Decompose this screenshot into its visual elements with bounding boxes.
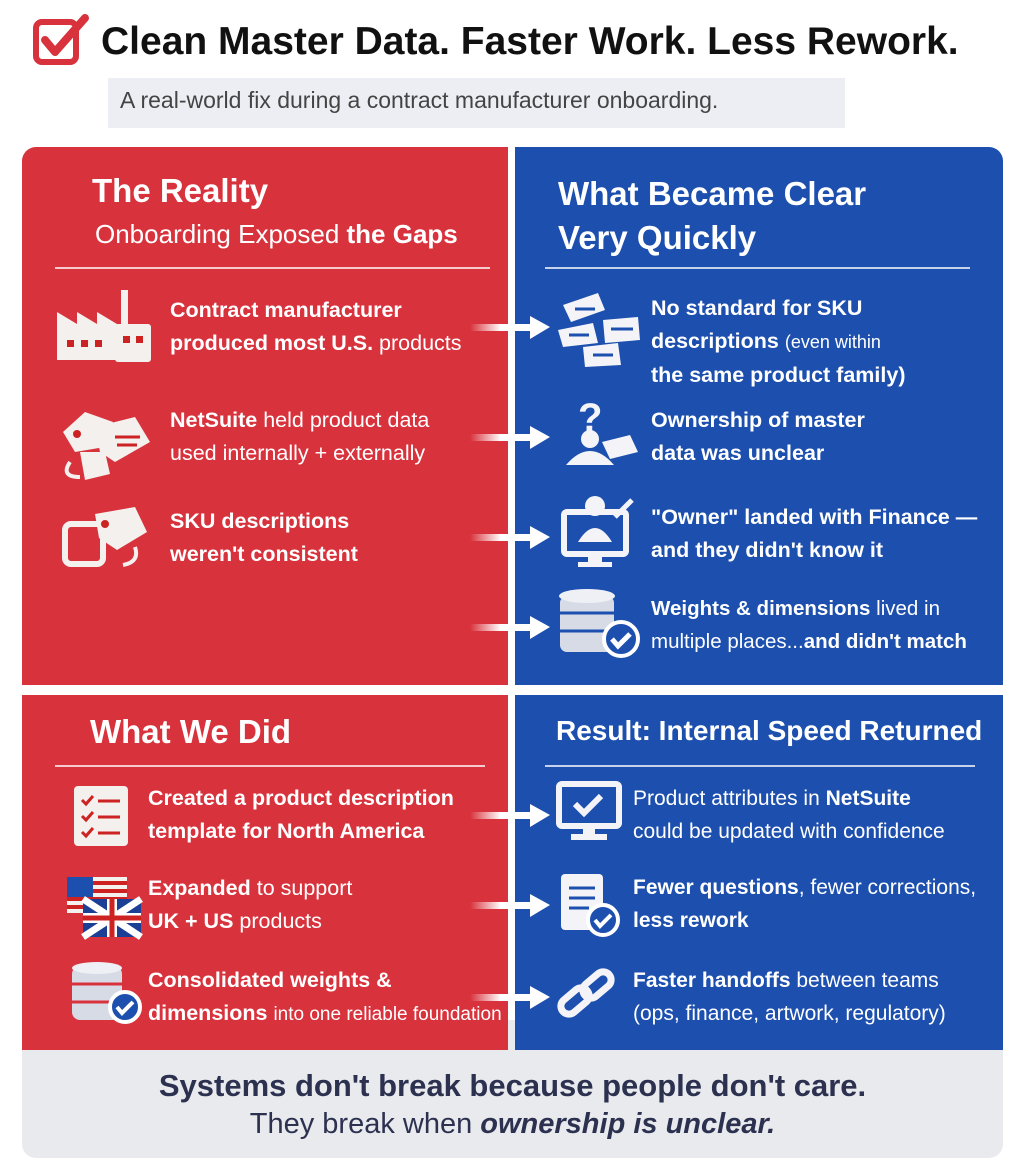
text: no standard: descriptions (even within [651,329,881,353]
icon: flags [67,877,143,940]
heading: what we did: What We Did [90,713,291,750]
text: sku descriptions: weren't consistent [170,542,358,566]
text: product attributes [633,787,945,843]
icon: person question: ? [578,397,602,440]
text: netsuite [170,408,430,465]
icon: person question [566,397,638,465]
text: no standard [651,296,905,387]
panel: what we did [22,695,508,1050]
text: netsuite: used internally + externally [170,441,425,465]
heading: what became clear: Very Quickly [558,219,756,256]
subtitle: A real-world fix during a contract manufacturer onboarding. [120,87,718,113]
text: no standard: No standard for SKU [651,296,862,320]
text: uk us [148,876,352,933]
text: weights dimensions: multiple places...and didn't match [651,630,967,653]
title: Clean Master Data. Faster Work. Less Rework. [101,20,959,63]
text: contract manufacturer [170,298,462,355]
text: product attributes: could be updated with confidence [633,820,945,843]
text: sku descriptions [170,509,358,566]
text: faster handoffs: Faster handoffs between teams [633,969,939,992]
text: no standard: the same product family) [651,363,905,387]
text: faster handoffs [633,969,946,1025]
text: fewer questions: less rework [633,909,749,932]
text: consolidated: Consolidated weights & [148,968,392,992]
text: template: Created a product description [148,786,454,810]
icon: database check [72,962,142,1024]
text: template [148,786,454,843]
heading: the reality: The Reality [92,172,268,209]
heading: result: Result: Internal Speed Returned [556,715,982,746]
text: owner finance: and they didn't know it [651,538,883,562]
text: contract manufacturer: Contract manufacturer [170,298,402,322]
icon: tag box [62,507,147,567]
text: netsuite: NetSuite held product data [170,408,429,432]
text: contract manufacturer: produced most U.S. products [170,331,462,355]
subheading: Onboarding Exposed the Gaps [95,219,458,249]
icon: monitor check [556,781,622,840]
text: ownership unclear [651,408,865,465]
icon: monitor person [561,496,634,567]
text: ownership unclear: Ownership of master [651,408,865,432]
heading: what became clear [558,175,866,256]
subtitle [108,78,845,128]
footer text: Systems don't break because people don't care. [159,1068,866,1103]
text: consolidated [148,968,502,1025]
text: fewer questions [633,876,976,932]
panel: the reality [22,147,508,685]
icon: database check [559,589,640,658]
footer text: They break when ownership is unclear. [250,1108,775,1140]
heading: what became clear: What Became Clear [558,175,866,212]
footer background [22,1020,1003,1158]
text: template: template for North America [148,819,424,843]
icon: checkbox [33,14,89,65]
text: weights dimensions: Weights & dimensions lived in [651,597,940,620]
arrows [472,316,550,639]
footer text [159,1068,866,1140]
icon: checklist [74,786,128,846]
text: faster handoffs: (ops, finance, artwork, regulatory) [633,1002,946,1025]
text: uk us: UK + US products [148,909,322,933]
arrows bottom [472,804,550,1009]
icon: link [557,968,615,1018]
icon: tags [558,293,640,367]
icon: document check [561,874,620,937]
text: ownership unclear: data was unclear [651,441,824,465]
text: uk us: Expanded to support [148,876,352,900]
text: product attributes: Product attributes in NetSuite [633,787,911,810]
panel: what became clear [515,147,1003,685]
icon: tags [63,412,150,480]
text: fewer questions: Fewer questions, fewer corrections, [633,876,976,899]
panel: result [515,695,1003,1050]
text: consolidated: dimensions into one reliable foundation [148,1001,502,1025]
text: owner finance [651,505,978,562]
icon: factory [57,290,151,362]
text: weights dimensions [651,597,967,653]
text: sku descriptions: SKU descriptions [170,509,349,533]
text: owner finance: "Owner" landed with Finance — [651,505,977,529]
